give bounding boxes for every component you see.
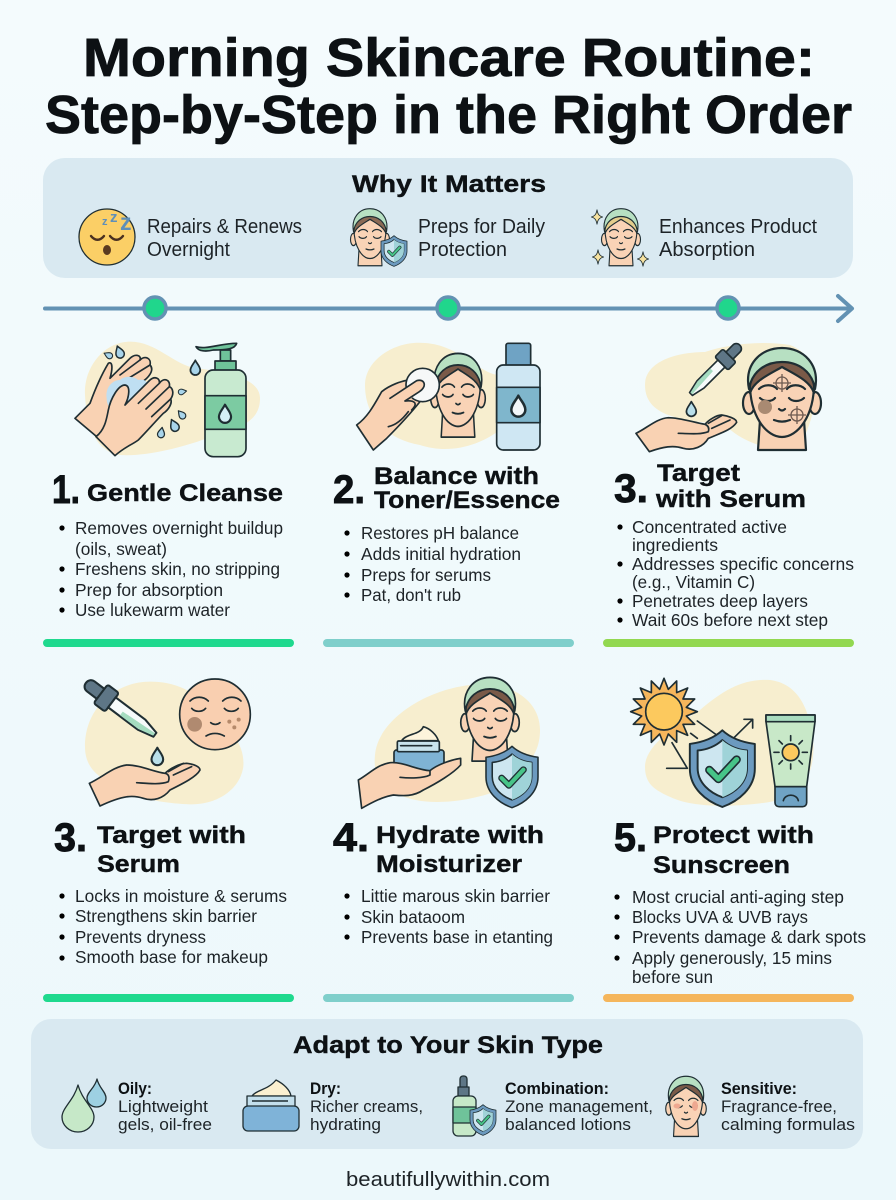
text: enhances [659,216,817,261]
heading: target with serum [54,816,246,878]
timeline arrow [45,296,852,321]
heading: protect [614,816,814,879]
icon: sleeping face: z [110,209,118,226]
illustration: sun, shield and sunscreen tube [631,678,815,807]
heading: hydrate: Moisturizer [376,851,523,878]
bullet list: Wait 60s before next step [632,610,828,630]
text: combination: balanced lotions [505,1115,631,1134]
icon: cream jar [243,1080,299,1131]
bullet list [59,886,287,967]
bullet list [344,523,521,605]
heading: balance: Toner/Essence [374,487,560,514]
heading: target with serum: 3. [54,816,87,860]
bullet list: Smooth base for makeup [75,947,268,967]
illustration: serum dropper, hand and face [636,339,821,452]
heading: gentle cleanse: Gentle Cleanse [87,480,283,507]
text: sensitive: calming formulas [721,1115,855,1134]
heading: target with serum: Serum [97,851,180,878]
bullet list: before sun [632,967,713,987]
bullet list: Pat, don't rub [361,585,461,605]
text: sensitive [721,1079,855,1134]
ray arrows [667,719,753,768]
text: repairs: Overnight [147,239,230,261]
bullet list: Strengthens skin barrier [75,906,257,926]
heading: target with serum: 3. [614,467,648,511]
text: enhances: Enhances Product [659,216,817,238]
bullet list: Prep for absorption [75,580,223,600]
panel: step 2 [323,343,574,647]
heading: gentle cleanse: 1. [52,468,80,512]
bullet list [617,517,854,630]
footer: beautifullywithin.com [346,1169,550,1191]
sun [631,678,697,745]
title: Step-by-Step in the Right Order [45,85,852,145]
icon: sleeping face: z [120,209,132,235]
round face [180,679,250,750]
heading: balance: 2. [333,468,365,512]
bullet list: Apply generously, 15 mins [632,948,832,968]
illustration: toner and cotton pad [357,343,540,450]
heading: target with serum: with Serum [655,486,806,513]
bullet list: Penetrates deep layers [632,591,808,611]
illustration: moisturizer jar and shield [358,677,540,808]
bullet list: Freshens skin, no stripping [75,559,280,579]
panel: step 1 [43,342,294,647]
bullet list: Blocks UVA & UVB rays [632,907,808,927]
bullet list: ingredients [632,535,718,555]
text: preps: Preps for Daily [418,216,545,238]
title: Morning Skincare Routine: [83,28,815,88]
bullet list: Prevents dryness [75,927,206,947]
sunscreen tube [766,715,815,807]
icon: face with shield [350,209,407,266]
heading: protect: Protect with [653,822,814,849]
heading: balance: Balance with [374,463,539,490]
icon: sleeping face [79,209,135,265]
bullet list: Addresses specific concerns [632,554,854,574]
text: dry: hydrating [310,1115,381,1134]
bullet list: Restores pH balance [361,523,519,543]
text: dry: Dry: [310,1079,341,1098]
text: combination: Zone management, [505,1097,653,1116]
bullet list: Prevents base in etanting [361,927,553,947]
text: enhances: Absorption [659,239,755,261]
text: sensitive: Fragrance-free, [721,1097,837,1116]
icon: oil drops [62,1079,106,1132]
heading: hydrate [333,816,544,878]
heading: adapt: Adapt to Your Skin Type [293,1032,603,1059]
text: preps: Protection [418,239,507,261]
text: oily: Oily: [118,1079,152,1098]
text: repairs [147,216,302,261]
bullet list: Concentrated active [632,517,787,537]
heading: target with serum [614,460,806,513]
bullet list: Adds initial hydration [361,544,521,564]
panel: step 3 top [603,339,854,647]
icon: face with sparkles [591,209,649,266]
bullet list [614,887,866,987]
heading: hydrate: Hydrate with [376,822,544,849]
heading: balance [333,463,560,514]
bullet list: (e.g., Vitamin C) [632,572,755,592]
panel: step 5 [603,678,866,1002]
heading: protect: Sunscreen [653,852,790,879]
bullet list: Use lukewarm water [75,600,230,620]
icon: sleeping face: z [102,216,108,228]
icon: sensitive face [666,1076,706,1136]
panel: adapt to your skin type [31,1019,863,1149]
text: combination [505,1079,653,1134]
heading: target with serum: Target with [97,822,246,849]
text: dry [310,1079,423,1134]
text: oily: Lightweight [118,1097,208,1116]
bullet list: Most crucial anti-aging step [632,887,844,907]
text: repairs: Repairs & Renews [147,216,302,238]
heading: hydrate: 4. [333,816,369,860]
illustration: dropper over palm with round face [79,674,250,806]
text: sensitive: Sensitive: [721,1079,797,1098]
text: combination: Combination: [505,1079,609,1098]
panel: why it matters [43,158,853,278]
panel: step 3 bottom [43,674,294,1002]
panel: step 4 [323,677,574,1002]
cleanser bottle [196,343,246,457]
heading: why it matters: Why It Matters [352,171,546,198]
icon: serum bottle with shield [453,1076,496,1136]
text: oily: gels, oil-free [118,1115,212,1134]
toner bottle [497,343,540,450]
dropper [684,339,746,401]
text: oily [118,1079,212,1134]
bullet list [344,886,553,947]
bullet list: Littie marous skin barrier [361,886,550,906]
bullet list [59,518,283,620]
heading: target with serum: Target [657,460,740,487]
text: dry: Richer creams, [310,1097,423,1116]
bullet list: Preps for serums [361,565,491,585]
illustration: washing hands and cleanser [75,342,260,457]
heading: gentle cleanse [52,468,283,512]
bullet list: Locks in moisture & serums [75,886,287,906]
title [45,28,852,145]
bullet list: (oils, sweat) [75,539,167,559]
text: preps [418,216,545,261]
bullet list: Removes overnight buildup [75,518,283,538]
bullet list: Prevents damage & dark spots [632,927,866,947]
heading: protect: 5. [614,816,647,860]
bullet list: Skin bataoom [361,907,465,927]
